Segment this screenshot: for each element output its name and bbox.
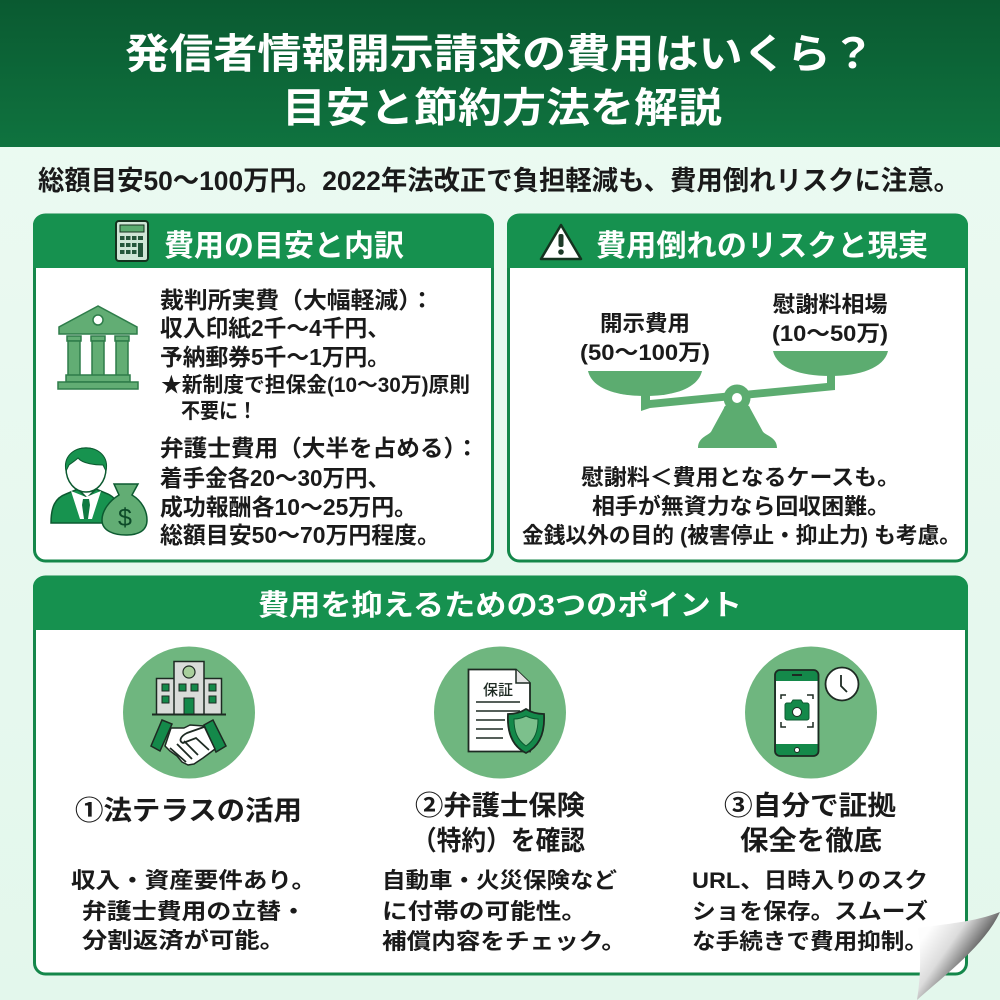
point 2: lawyer insurance <box>382 646 626 954</box>
page curl <box>917 912 1000 1000</box>
icon: insurance document and shield: 保証 <box>483 682 513 699</box>
heading: point 2 <box>412 791 585 856</box>
label: solatium: (10〜50万) <box>772 321 888 346</box>
title text: 目安と節約方法を解説 <box>282 85 722 131</box>
text: point 3: URL、日時入りのスク <box>692 868 928 893</box>
icon: courthouse <box>58 306 138 389</box>
text: risk explanation <box>522 465 961 548</box>
icon: phone camera and clock <box>745 646 877 778</box>
heading: point 2: ②弁護士保険 <box>415 791 585 821</box>
label: solatium: 慰謝料相場 <box>772 292 888 317</box>
text: court costs <box>160 287 470 423</box>
chart: balance scale <box>588 351 888 448</box>
text: court costs: 不要に！ <box>181 400 257 423</box>
heading: point 2: （特約）を確認 <box>412 826 585 856</box>
label: disclosure cost: (50〜100万) <box>580 340 710 365</box>
icon: money bag: $ <box>118 504 132 532</box>
heading: point 3: 保全を徹底 <box>740 826 882 856</box>
summary line: 総額目安50〜100万円。2022年法改正で負担軽減も、費用倒れリスクに注意。 <box>38 166 960 196</box>
text: court costs: ★新制度で担保金(10〜30万)原則 <box>161 374 470 397</box>
label: disclosure cost <box>580 311 710 365</box>
text: risk explanation: 相手が無資力なら回収困難。 <box>592 494 890 519</box>
text: court costs: 収入印紙2千〜4千円、 <box>160 315 390 341</box>
text: attorney fees: 成功報酬各10〜25万円。 <box>160 494 417 520</box>
panel heading: three points: 費用を抑えるための3つのポイント <box>258 589 742 622</box>
label: solatium <box>772 292 888 346</box>
panel: three savings points <box>33 576 968 974</box>
text: point 2: に付帯の可能性。 <box>382 899 587 924</box>
icon: money bag <box>102 484 147 535</box>
text: attorney fees <box>160 435 479 548</box>
text: risk explanation: 慰謝料＜費用となるケースも。 <box>581 465 900 490</box>
heading: point 3: ③自分で証拠 <box>724 791 896 821</box>
text: point 3 <box>692 868 928 954</box>
text: attorney fees: 弁護士費用（大半を占める）： <box>160 435 479 461</box>
text: point 3: ショを保存。スムーズ <box>692 899 928 924</box>
icon: office and handshake <box>123 646 255 778</box>
text: point 2: 自動車・火災保険など <box>382 868 617 893</box>
text: attorney fees: 総額目安50〜70万円程度。 <box>160 522 440 548</box>
icon: insurance document and shield <box>434 646 566 778</box>
point 3: preserve evidence <box>692 646 928 954</box>
text: risk explanation: 金銭以外の目的 (被害停止・抑止力) も考慮。 <box>522 523 961 548</box>
title text <box>125 31 875 131</box>
panel heading: cost breakdown: 費用の目安と内訳 <box>164 230 404 263</box>
title text: 発信者情報開示請求の費用はいくら？ <box>125 31 875 77</box>
text: point 1 <box>71 868 316 953</box>
text: point 1: 弁護士費用の立替・ <box>82 899 306 924</box>
text: court costs: 裁判所実費（大幅軽減）： <box>160 287 434 313</box>
text: point 1: 分割返済が可能。 <box>82 928 285 953</box>
icon: calculator <box>116 221 148 261</box>
label: disclosure cost: 開示費用 <box>600 311 690 336</box>
icon: lawyer <box>51 448 118 523</box>
heading: point 3 <box>724 791 896 856</box>
icon: warning triangle <box>541 225 581 259</box>
point 1: Houterasu <box>71 646 316 953</box>
text: attorney fees: 着手金各20〜30万円、 <box>160 465 390 491</box>
panel: cost breakdown <box>33 214 494 561</box>
text: point 2: 補償内容をチェック。 <box>382 929 626 954</box>
panel heading: risk: 費用倒れのリスクと現実 <box>596 230 928 263</box>
text: point 2 <box>382 868 626 954</box>
text: court costs: 予納郵券5千〜1万円。 <box>160 344 390 370</box>
title banner <box>0 0 1000 147</box>
panel: risk of cost overrun <box>507 214 968 561</box>
text: point 1: 収入・資産要件あり。 <box>71 868 316 893</box>
text: point 3: な手続きで費用抑制。 <box>692 929 928 954</box>
heading: point 1: ①法テラスの活用 <box>75 796 302 826</box>
